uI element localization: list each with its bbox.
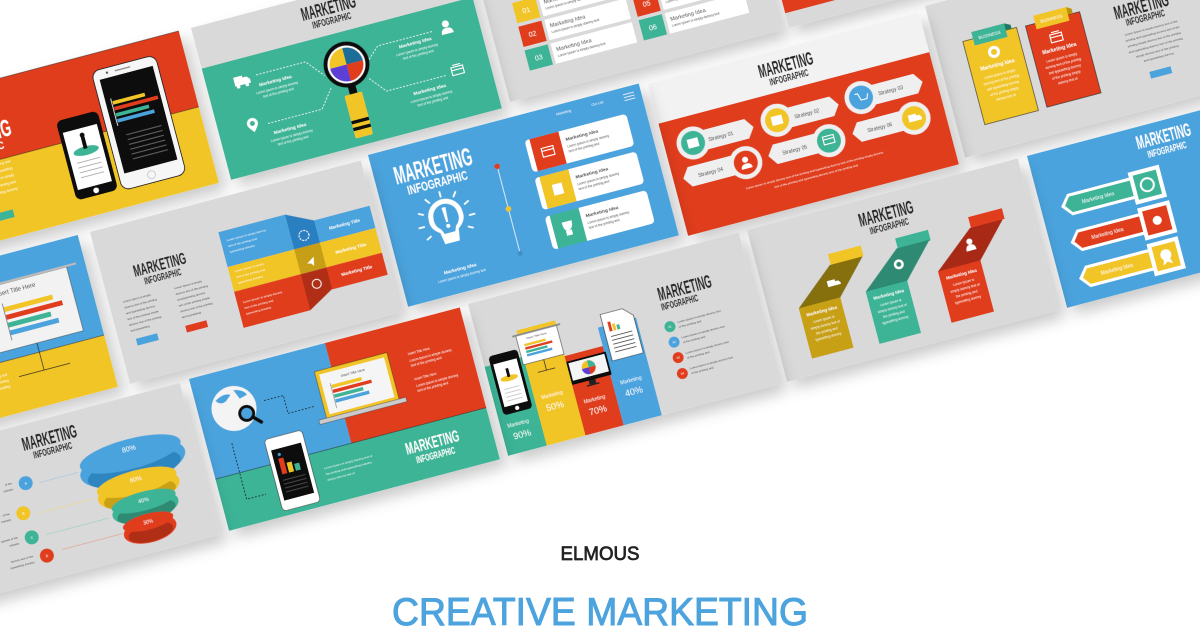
fold graphic: Marketing Title	[341, 264, 373, 277]
letter markers: B	[22, 511, 26, 516]
slide: presentation board	[0, 235, 118, 458]
number tile 01: 01	[522, 7, 531, 15]
side text: of the	[2, 512, 10, 518]
number tile 05: 05	[642, 0, 652, 9]
funnel disc yellow	[93, 460, 184, 517]
button	[0, 209, 15, 225]
idea texts: Marketing Idea	[258, 74, 293, 88]
green panel text: Lorem Ipsum is simply dummy text of	[324, 454, 373, 470]
card 3: Lorem Ipsum is simply dummy	[587, 210, 630, 225]
green panel text: the printing and typesetting industry	[325, 460, 373, 476]
numbered list	[663, 308, 735, 380]
strategy 04	[679, 142, 766, 195]
slide: 3D columns	[747, 158, 1058, 382]
document	[600, 306, 643, 361]
numbered list: of the printing and	[682, 334, 706, 344]
list cards: Lorem Ipsum is simply dummy text	[672, 11, 720, 28]
nav: Our List	[591, 100, 604, 107]
green column: Marketing Idea	[873, 288, 905, 301]
body text: Lorem Ipsum is simply dummy text of the	[1124, 19, 1178, 37]
buttons	[136, 320, 208, 346]
strategy 02	[757, 88, 843, 140]
body text right: simply/printing dummy	[177, 291, 206, 302]
fold graphic: typesetting industry	[246, 305, 272, 316]
body text: printing and typesetting dummy text of the	[1125, 25, 1180, 43]
heading: INFOGRAPHIC	[311, 11, 353, 32]
fold graphic: text of the printing and	[228, 237, 258, 248]
heading	[299, 0, 360, 34]
numbered list: Lorem Ipsum is simply dummy text	[685, 340, 729, 355]
numbered list: Lorem Ipsum is simply dummy text	[681, 324, 725, 339]
nav: Marketing	[556, 109, 572, 117]
laptop	[307, 351, 407, 425]
red panel text: Lorem Ipsum is simple dummy	[416, 373, 459, 388]
side text: industry	[3, 487, 14, 494]
bar 40 percent: Marketing	[620, 375, 643, 387]
list cards: Marketing Idea	[556, 38, 593, 53]
bar 70 percent: Marketing	[583, 394, 606, 406]
fold graphic: Marketing Title	[329, 218, 361, 231]
yellow column: Marketing Idea	[806, 305, 838, 318]
strategy 03: Strategy 03	[878, 85, 904, 97]
letter markers	[7, 474, 55, 567]
green column: simply dummy text of	[877, 303, 907, 314]
green panel text: simply dummy text of	[327, 471, 355, 482]
arrow row 1	[1057, 165, 1167, 223]
yellow card: and typesetting dummy	[987, 79, 1020, 92]
green column: the printing and	[883, 309, 905, 319]
numbered list: of the printing and	[687, 350, 710, 360]
body text	[1124, 19, 1187, 66]
idea texts: Marketing Idea	[273, 122, 307, 136]
strategy 05	[764, 120, 849, 173]
letter markers: A	[24, 481, 28, 486]
slide: percentage bars	[468, 232, 779, 456]
nav	[556, 92, 635, 118]
idea texts: Marketing Idea	[398, 36, 433, 50]
number tile 01	[512, 0, 541, 23]
body text left	[122, 291, 164, 333]
funnel disc yellow: 60%	[130, 476, 143, 485]
idea texts: text of the printing and	[263, 87, 294, 99]
heading	[20, 421, 81, 464]
body text right: Lorem Ipsum is simply	[174, 279, 203, 290]
bar 40 percent	[598, 318, 662, 425]
caption: Lorem Ipsum is simply dummy text	[438, 268, 486, 284]
presentation board: Insert Title Here	[526, 331, 547, 340]
red column: simply dummy text of	[950, 282, 980, 294]
funnel disc green	[108, 483, 182, 530]
slide: map and devices	[189, 307, 500, 531]
yellow card: Marketing Idea	[980, 58, 1015, 73]
numbered list: Lorem Ipsum is simply dummy text	[689, 355, 734, 370]
body text left: dummy text of the printing	[129, 315, 162, 327]
numbered list: 04	[680, 371, 685, 376]
heading: MARKETING	[655, 271, 714, 305]
strategy 06	[848, 98, 934, 150]
monitor	[566, 351, 613, 390]
red card: dummy text of	[1058, 76, 1078, 85]
heading: INFOGRAPHIC	[405, 167, 470, 198]
phone	[488, 349, 533, 416]
arrow row 2: Marketing Idea	[1091, 227, 1125, 241]
arrow row 2	[1067, 200, 1177, 259]
slide: folded panels	[90, 160, 401, 384]
dashed arrow down	[232, 438, 266, 499]
red panel text	[407, 341, 460, 393]
yellow card: BUSINESS	[978, 30, 1001, 40]
number tile 03: 03	[534, 54, 544, 63]
bar 50 percent: 50%	[545, 399, 565, 413]
caption	[436, 260, 486, 284]
body text left: Lorem Ipsum is simply	[122, 292, 152, 304]
card 3	[545, 190, 655, 250]
body text left: dummy text of the printing	[124, 297, 158, 310]
list cards: Lorem Ipsum is simply dummy text	[557, 42, 606, 58]
red card	[1023, 4, 1101, 107]
heading	[0, 115, 16, 169]
red column: the printing and	[956, 289, 978, 299]
icon: globe with magnifier	[207, 381, 262, 436]
strategy 03	[841, 65, 927, 118]
card 2: Marketing Idea	[575, 166, 609, 181]
heading: INFOGRAPHIC	[660, 293, 700, 314]
body text	[0, 159, 18, 204]
strategy 01	[673, 111, 758, 163]
bar 90 percent	[485, 357, 547, 456]
bar 40 percent: 40%	[624, 384, 644, 399]
body text: printing simply dummy text of the printing	[1127, 31, 1181, 48]
heading: MARKETING	[856, 197, 916, 231]
card 1: text of the printing and	[568, 142, 600, 154]
side text: industry	[9, 541, 20, 548]
slide: business cards	[925, 0, 1200, 158]
numbered list: of the printing and	[678, 319, 702, 329]
card 3: Marketing Idea	[585, 205, 619, 219]
red card: dummy text of the printing	[1045, 57, 1082, 70]
heading	[856, 197, 918, 239]
idea texts: Marketing Idea	[413, 83, 447, 97]
presentation board	[0, 262, 93, 358]
yellow card: dummy text of the printing	[983, 73, 1020, 87]
green panel text	[324, 454, 376, 482]
large white phone	[91, 55, 186, 191]
slide: green magnifier	[191, 0, 502, 180]
brand name: ELMOUS	[560, 544, 640, 565]
caption: Lorem Ipsum is simply dummy text of the printing and typesetting dummy text of the printing simply dummy	[746, 150, 884, 190]
number tile 02: 02	[528, 30, 537, 39]
red card: of the printing simply	[1052, 69, 1081, 81]
side text: typeset of the	[1, 535, 19, 544]
numbered list: Lorem Ipsum is simply dummy text	[677, 309, 721, 324]
side text: typesetting industry	[10, 560, 36, 570]
idea texts: text of the printing and	[403, 49, 434, 61]
body text: simply dummy text of the printing	[1136, 44, 1179, 59]
heading: INFOGRAPHIC	[32, 441, 74, 462]
number tile 02	[518, 21, 547, 47]
caption: text of the printing and typesetting dummy text of the printing and	[774, 163, 859, 189]
dashed connectors	[255, 28, 446, 124]
arrow row 1: Marketing Idea	[1081, 191, 1115, 205]
small black phone	[56, 110, 118, 201]
heading: INFOGRAPHIC	[415, 446, 457, 466]
card 1: Marketing Idea	[565, 128, 599, 143]
funnel disc blue: 80%	[121, 444, 137, 455]
body text right: and typesetting	[181, 310, 202, 319]
red card: Lorem Ipsum is simply	[1046, 52, 1078, 64]
idea texts: text of the printing and	[277, 135, 309, 147]
green column: typesetting dummy	[882, 315, 909, 325]
icon: truck	[233, 74, 252, 89]
icon: person	[439, 19, 454, 35]
body text left: text of the printing simple	[127, 309, 160, 321]
body text right: dummy text of the printing	[175, 284, 209, 296]
list cards: Lorem Ipsum is simply dummy text	[551, 18, 600, 34]
side text: industry	[1, 518, 12, 524]
red panel text: text of the printing and	[410, 356, 442, 368]
yellow column: the printing and	[816, 326, 838, 336]
dashed arrow	[264, 388, 315, 418]
slide: list 01-06	[470, 0, 781, 102]
strategy 04: Strategy 04	[698, 167, 724, 179]
red column: Marketing Idea	[946, 268, 978, 281]
card 2	[534, 151, 644, 210]
icon: light bulb	[412, 185, 480, 250]
icon: cards	[450, 63, 464, 76]
heading	[1134, 120, 1196, 163]
red column	[926, 208, 1027, 323]
heading: INFOGRAPHIC	[768, 68, 810, 89]
body text: and typesetting dummy	[1143, 51, 1175, 63]
heading	[391, 143, 478, 200]
yellow card: dummy text of	[996, 93, 1016, 102]
side text: of the	[4, 481, 13, 487]
body text: and typesetting dummy text of the printing	[1128, 36, 1183, 54]
red panel text: Insert Title Here	[407, 347, 430, 356]
yellow card	[961, 21, 1038, 125]
heading: INFOGRAPHIC	[869, 217, 910, 237]
yellow panel text	[0, 373, 11, 394]
body text right: dummy text of the printing	[180, 301, 213, 314]
card 2: text of the printing and	[578, 179, 610, 191]
body text right	[174, 278, 215, 319]
laptop: Insert Title Here	[340, 368, 365, 378]
card 1	[524, 114, 634, 172]
yellow column: Lorem Ipsum is	[813, 315, 835, 324]
red card: Marketing Idea	[1042, 42, 1077, 56]
bar 70 percent	[565, 346, 624, 435]
icon: pin	[246, 117, 260, 134]
slide: blue main with bulb	[368, 83, 679, 307]
slide: red strip at top edge	[749, 0, 1060, 28]
heading: INFOGRAPHIC	[143, 267, 183, 288]
body text right: text of the printing simple	[178, 296, 211, 308]
bar 50 percent: Marketing	[541, 390, 564, 401]
green column: Lorem Ipsum is	[880, 298, 902, 307]
funnel disc red: 30%	[143, 518, 154, 527]
fold graphic: Lorem Ipsum is simply dummy	[226, 228, 267, 242]
red card: and typesetting dummy	[1048, 63, 1082, 76]
magnifying glass	[318, 36, 388, 142]
numbered list: 01	[668, 324, 672, 329]
body text left: and typesetting dummy	[126, 304, 156, 315]
arrows	[31, 465, 122, 553]
red card: BUSINESS	[1040, 13, 1063, 24]
yellow column: simply dummy text of	[810, 319, 840, 331]
body text left: and typesetting	[130, 324, 150, 333]
side text	[0, 481, 36, 571]
number tile 06: 06	[648, 24, 658, 33]
phone	[264, 430, 321, 511]
slide: blue arrows	[1027, 54, 1200, 308]
idea texts: Lorem Ipsum is simply dummy	[256, 80, 299, 95]
heading	[756, 48, 818, 91]
side text: dummy text of the	[10, 554, 34, 564]
fold graphic	[218, 193, 392, 328]
fold graphic: Lorem Ipsum is simply dummy	[243, 290, 283, 304]
slide: red strategy pills	[648, 12, 959, 236]
fold graphic: text of the printing and	[236, 268, 266, 279]
bar 70 percent: 70%	[588, 403, 608, 417]
number tile 06	[639, 14, 667, 41]
red column: Lorem Ipsum is	[953, 278, 975, 287]
list cards: Marketing Idea	[549, 14, 587, 29]
strategy 05: Strategy 05	[782, 144, 808, 157]
slide: funnel	[0, 383, 220, 606]
yellow card: of the printing simply	[990, 86, 1020, 97]
heading	[655, 271, 716, 314]
card 3: text of the printing and	[588, 218, 620, 230]
yellow card: Lorem Ipsum is simply	[984, 68, 1016, 80]
card 2: Lorem Ipsum is simply dummy	[577, 171, 620, 186]
green column	[854, 230, 953, 344]
fold graphic: typesetting industry	[229, 243, 256, 254]
presentation board	[512, 323, 571, 376]
idea texts: Lorem Ipsum is simply dummy	[271, 128, 314, 143]
idea texts: Lorem Ipsum is simply dummy	[410, 89, 453, 104]
red panel text: Lorem Ipsum is simple dummy	[409, 348, 452, 363]
fold graphic: Lorem Ipsum is simply	[234, 262, 265, 273]
bar 50 percent	[516, 320, 585, 446]
arrow row 3	[1075, 236, 1186, 295]
fold graphic: Marketing Title	[335, 242, 367, 255]
bar 90 percent: Marketing	[507, 418, 530, 430]
numbered list: of the printing and	[691, 365, 714, 375]
red column: typesetting dummy	[955, 294, 982, 305]
heading: MARKETING	[756, 48, 815, 82]
strategy 06: Strategy 06	[867, 122, 893, 134]
heading	[1112, 0, 1173, 31]
idea texts: text of the printing and	[417, 96, 449, 108]
heading: MARKETING	[131, 249, 188, 281]
board stand	[12, 336, 70, 377]
numbered list: 03	[676, 355, 681, 360]
heading: MARKETING	[391, 143, 475, 190]
idea texts	[254, 34, 455, 149]
heading	[131, 249, 191, 290]
list cards	[538, 0, 749, 64]
yellow column: typesetting dummy	[815, 331, 842, 342]
idea texts: Lorem Ipsum is simply dummy	[396, 42, 439, 57]
heading: MARKETING	[20, 421, 79, 455]
bar 90 percent: 90%	[512, 427, 532, 442]
number tile 03	[524, 44, 553, 71]
strategy 01: Strategy 01	[708, 131, 734, 143]
fold graphic: text of the printing and	[244, 298, 274, 310]
button	[1149, 66, 1172, 79]
heading: INFOGRAPHIC	[1125, 8, 1166, 29]
funnel disc red	[120, 507, 180, 549]
list cards: Marketing Idea	[670, 8, 707, 23]
slider	[494, 163, 524, 257]
number tile 05	[632, 0, 661, 17]
letter markers: D	[45, 554, 49, 558]
yellow column	[787, 245, 886, 359]
heading: MARKETING	[403, 426, 461, 459]
arrow row 3: Marketing Idea	[1100, 263, 1134, 277]
card 1: Lorem Ipsum is simply dummy	[567, 134, 610, 149]
numbered list: 02	[672, 340, 677, 344]
heading	[403, 426, 464, 468]
fold graphic: typesetting industry	[237, 274, 264, 285]
letter markers: C	[30, 536, 34, 540]
funnel disc green: 40%	[138, 497, 150, 505]
red panel text: Insert Title Here	[414, 372, 437, 381]
caption: Marketing Idea	[443, 262, 478, 276]
red panel text: text of the printing and	[417, 381, 449, 393]
slide: red and yellow phones	[0, 31, 219, 254]
funnel disc blue	[74, 426, 190, 498]
strategy 02: Strategy 02	[794, 108, 820, 121]
